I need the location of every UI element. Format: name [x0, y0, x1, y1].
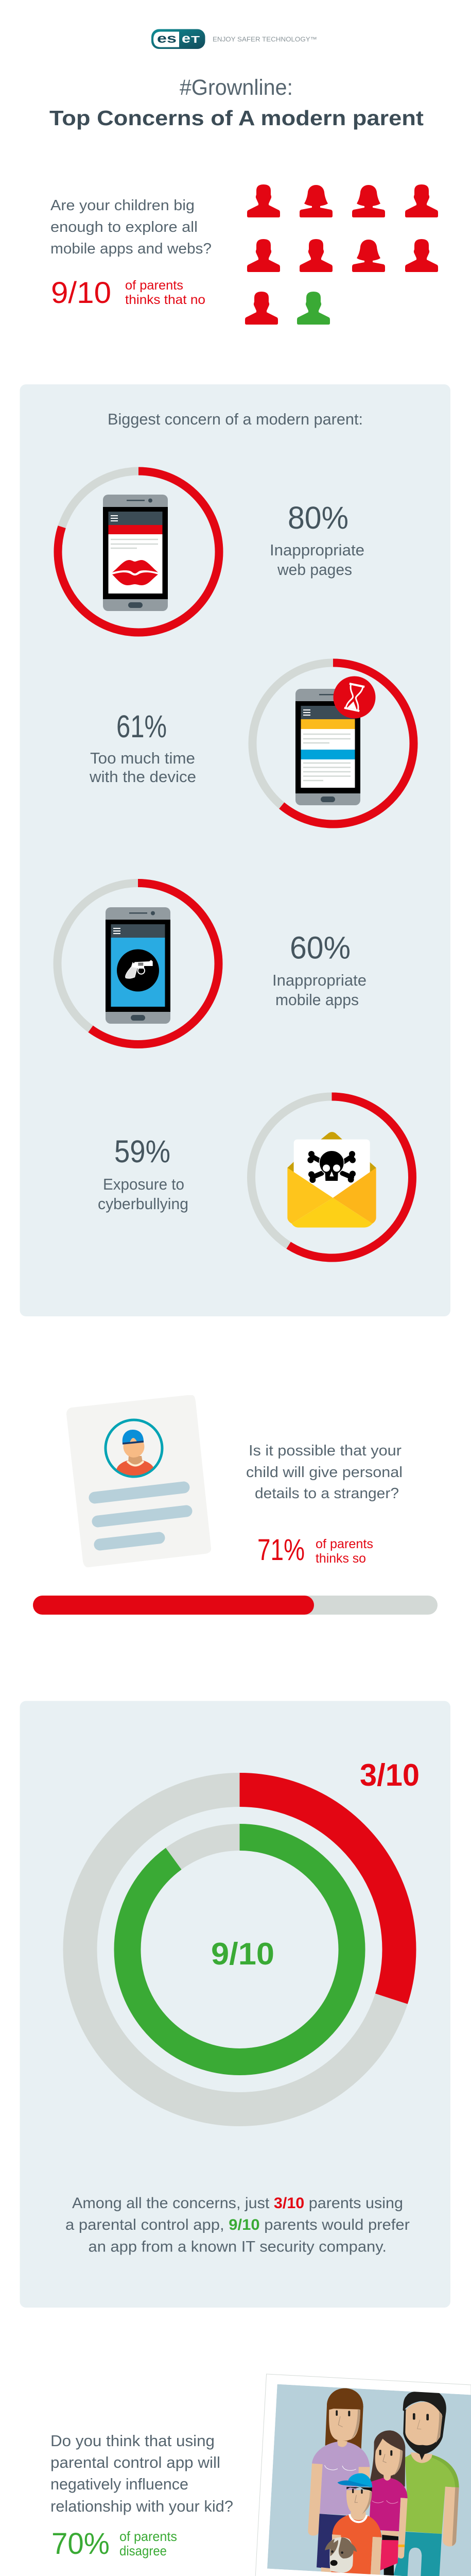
panel: biggest concerns	[20, 384, 450, 1316]
panel caption: an app from a known IT security company.	[89, 2238, 387, 2256]
title line two: Top Concerns of A modern parent	[49, 106, 424, 130]
logo: ESET: es	[157, 31, 177, 46]
icon: phone with lips	[103, 495, 168, 611]
stat: 59%: Exposure to	[103, 1175, 184, 1193]
panel: parental control app usage	[20, 1701, 450, 2308]
question: explore apps: mobile apps and webs?	[50, 241, 212, 257]
label 9/10: 9/10	[211, 1937, 274, 1971]
panel caption: a parental control app, 9/10 parents would prefer	[65, 2216, 410, 2233]
stat: 70%: disagree	[119, 2543, 167, 2558]
title line one: #Grownline:	[180, 75, 293, 100]
stat: 71%: 71%	[257, 1533, 305, 1567]
icon: envelope with skull	[287, 1132, 376, 1228]
logo: ESET	[151, 29, 205, 49]
question: relationship: Do you think that using	[50, 2432, 215, 2450]
avatar portrait	[106, 1420, 162, 1482]
illustration: profile card	[66, 1395, 211, 1567]
donut: 61%	[252, 663, 414, 824]
dog	[325, 2537, 357, 2573]
question: relationship: relationship with your kid?	[50, 2497, 233, 2515]
stat: 71%: thinks so	[316, 1551, 366, 1566]
illustration: family photo	[254, 2374, 471, 2576]
stat: 9/10 of parents: of parents	[125, 278, 183, 293]
daughter	[369, 2430, 408, 2576]
question: relationship: negatively influence	[50, 2475, 188, 2493]
question: personal details: Is it possible that your	[249, 1443, 402, 1459]
stat: 70%	[51, 2527, 177, 2561]
question: explore apps: Are your children big	[50, 197, 195, 214]
logo: ESET: e	[182, 31, 190, 46]
stat: 70%: of parents	[119, 2529, 177, 2544]
stat: 61%: 61%	[116, 709, 167, 744]
stat: 80%: Inappropriate	[270, 541, 364, 559]
stat: 80%: web pages	[277, 561, 352, 579]
stat: 9/10 of parents: thinks that no	[125, 293, 205, 307]
mother	[308, 2388, 370, 2573]
stat: 60%	[272, 930, 367, 1009]
stat: 61%: Too much time	[90, 749, 195, 767]
stat: 60%: Inappropriate	[272, 971, 367, 989]
stat: 60%: 60%	[290, 930, 351, 965]
stat: 80%	[270, 500, 364, 579]
icon: phone with hourglass	[295, 676, 376, 805]
question: personal details: details to a stranger?	[255, 1485, 399, 1502]
stat: 59%: cyberbullying	[98, 1195, 188, 1213]
logo tagline: ENJOY SAFER TECHNOLOGY™	[213, 36, 317, 43]
logo: ESET: T	[191, 35, 200, 45]
question: personal details	[246, 1443, 403, 1502]
icon: phone with gun	[106, 907, 170, 1024]
stat: 71%	[257, 1533, 373, 1567]
card text lines	[95, 1487, 186, 1545]
panel heading: Biggest concern of a modern parent:	[108, 410, 363, 428]
donut outer: 3/10	[80, 1790, 399, 2109]
question: relationship	[50, 2432, 233, 2515]
stat: 71%: of parents	[316, 1537, 373, 1551]
stat: 60%: mobile apps	[275, 991, 359, 1009]
question: explore apps: enough to explore all	[50, 219, 198, 235]
panel caption	[65, 2195, 410, 2256]
stat: 61%: with the device	[89, 768, 196, 786]
stat: 59%	[98, 1134, 188, 1213]
panel caption: Among all the concerns, just 3/10 parents using	[72, 2195, 403, 2212]
people pictogram: 9 red 1 green	[245, 184, 438, 325]
stat: 70%: 70%	[51, 2527, 110, 2561]
stat: 80%: 80%	[288, 500, 348, 535]
donut inner: 9/10	[128, 1837, 352, 2062]
donut: 80%	[58, 471, 219, 633]
question: relationship: parental control app will	[50, 2453, 220, 2471]
son with cap	[331, 2473, 382, 2575]
label 3/10: 3/10	[360, 1758, 420, 1792]
question: explore apps	[50, 197, 212, 257]
progress bar: 71%	[33, 1596, 438, 1615]
stat: 59%: 59%	[114, 1134, 170, 1169]
donut: 60%	[58, 883, 218, 1044]
stat: 9/10 of parents: 9/10	[51, 276, 111, 310]
father	[393, 2391, 459, 2576]
donut: 59%	[251, 1096, 412, 1258]
stat: 9/10 of parents	[51, 276, 205, 310]
question: personal details: child will give personal	[246, 1464, 403, 1481]
stat: 61%	[89, 709, 196, 786]
